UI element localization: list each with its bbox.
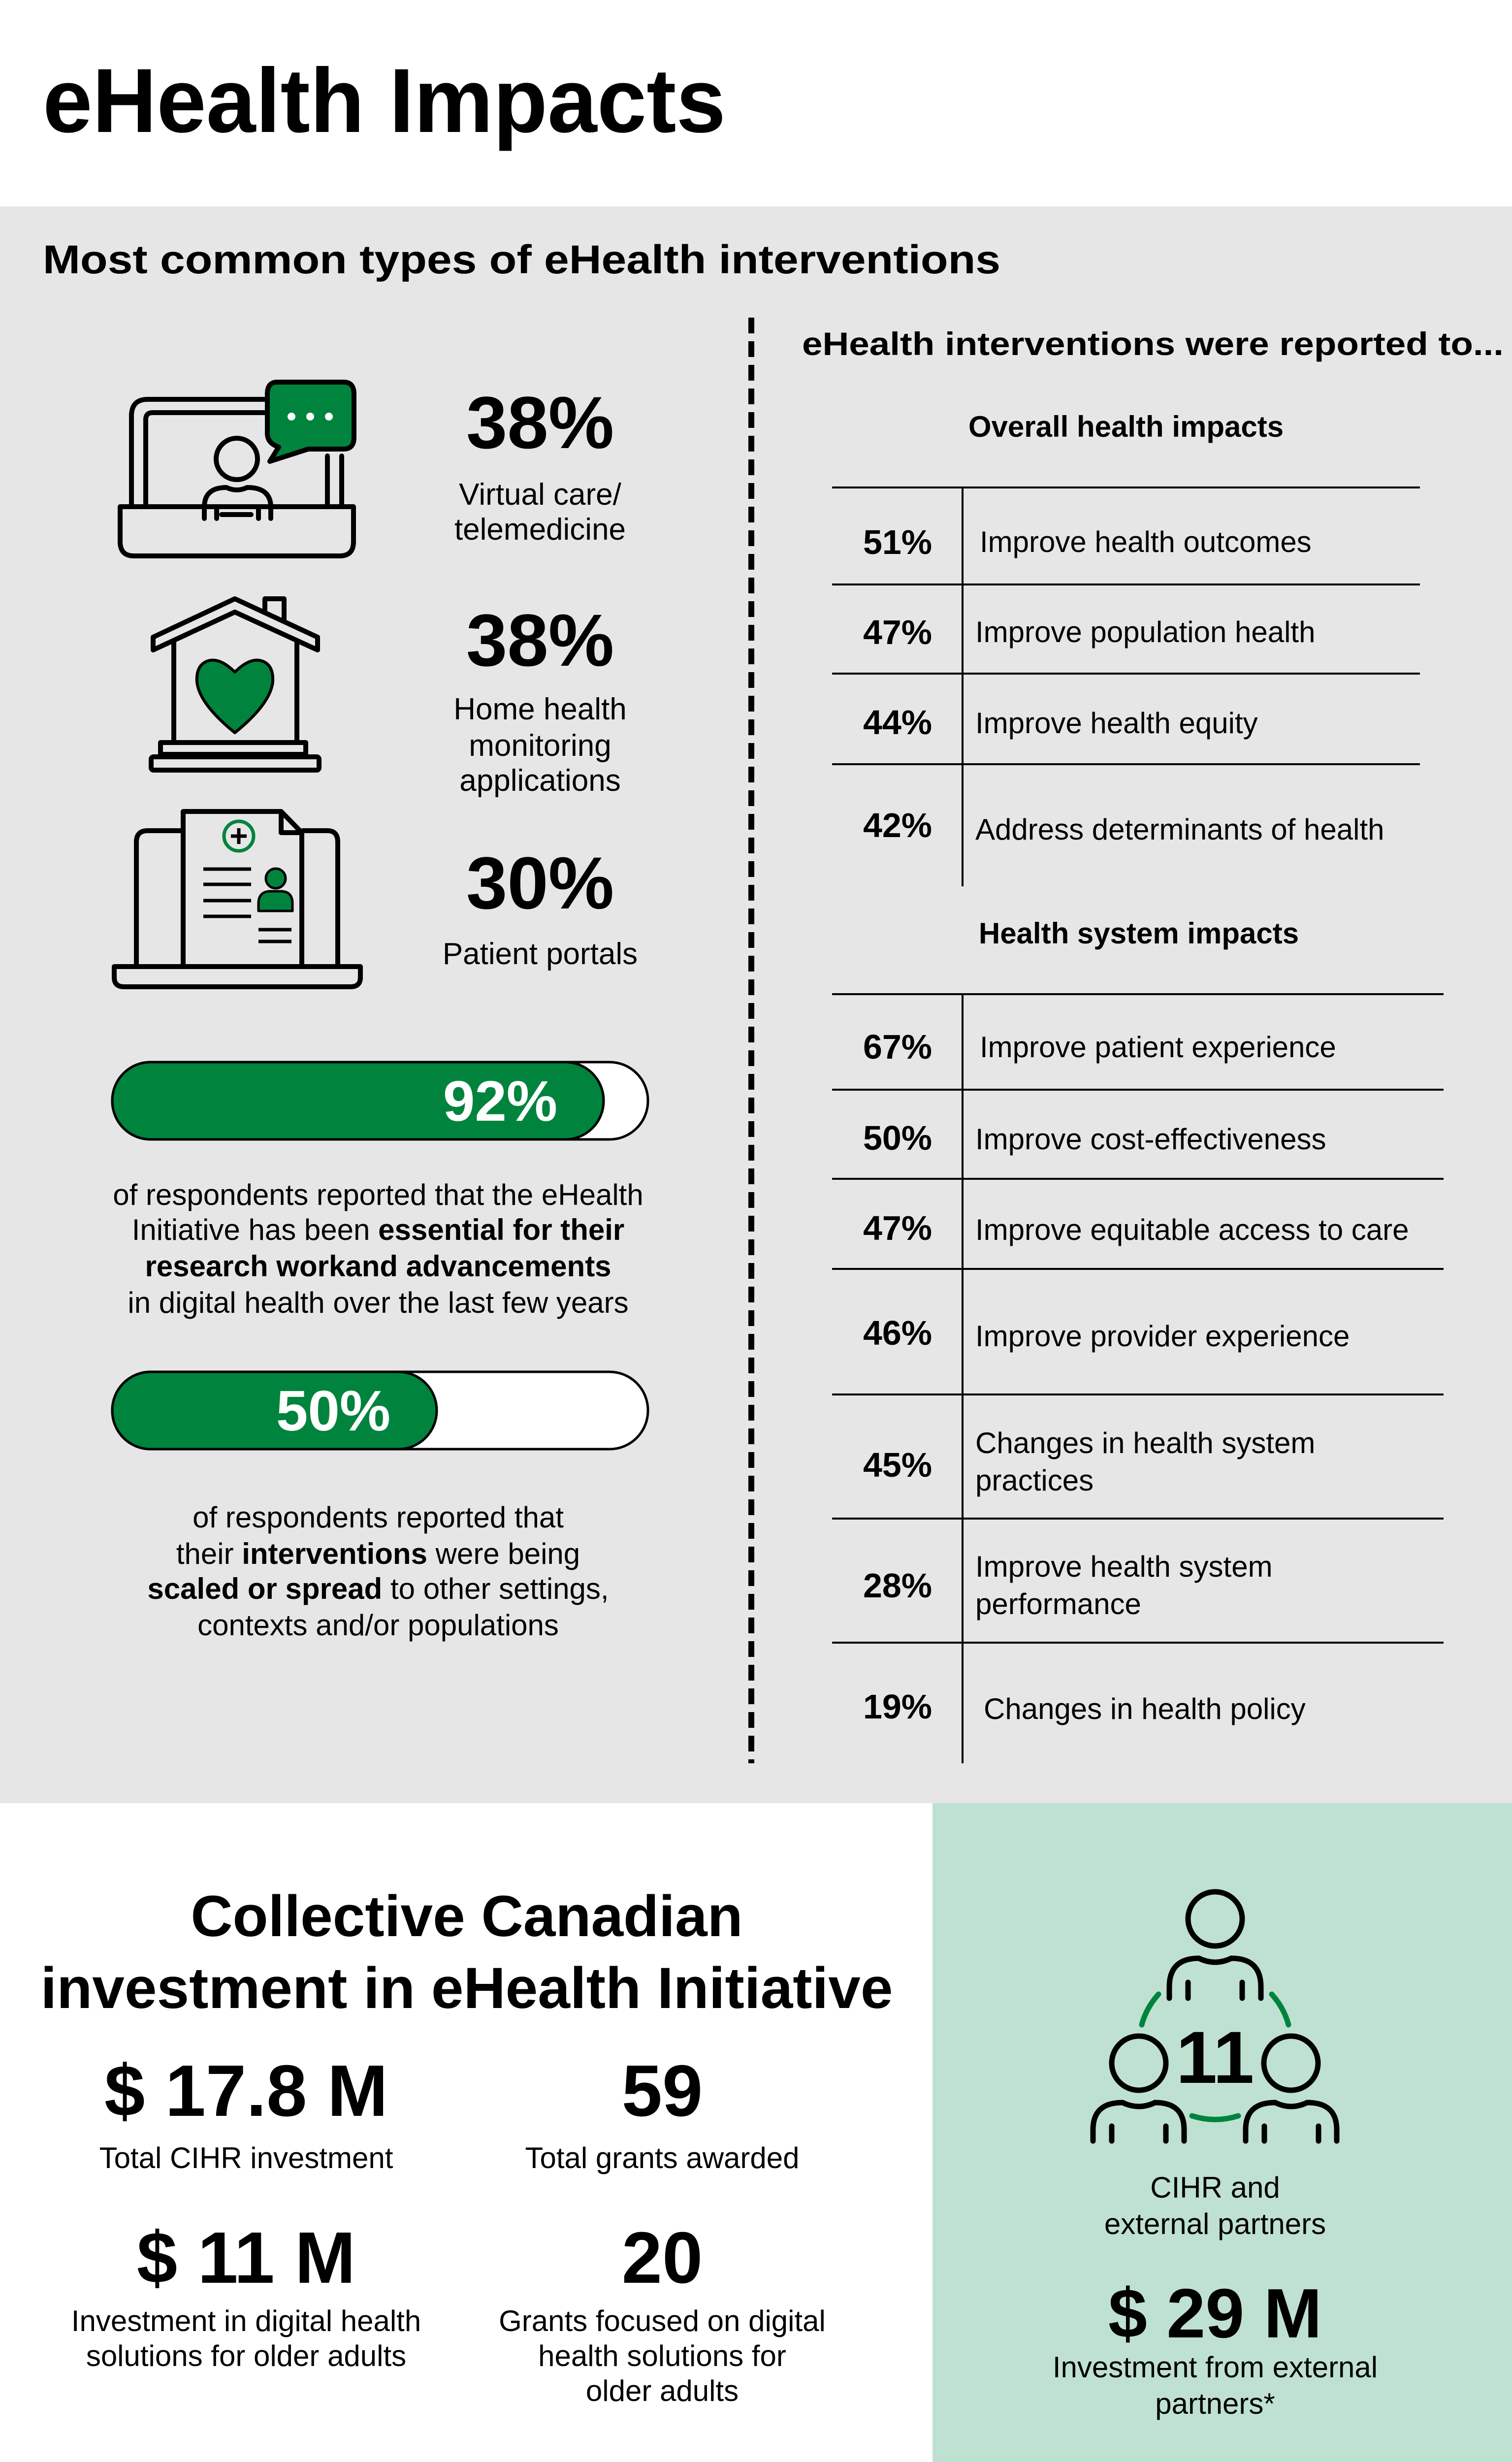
text: scaled or spread: their interventions were being [176,1537,580,1570]
subheading: health system impacts: Health system impacts [979,917,1299,950]
heading: reported to: eHealth interventions were reported to... [802,325,1504,362]
text: scaled or spread: scaled or spread to other settings, [147,1572,609,1605]
table: overall health impacts: 51% [863,523,932,561]
table: overall health impacts: Improve health outcomes [980,525,1312,558]
table: health system impacts: practices [975,1464,1094,1497]
divider: dashed [748,318,754,1763]
stat: total grants [525,2050,800,2174]
table: overall health impacts [832,487,1420,886]
table: health system impacts [832,994,1444,1763]
icon: patient portal [114,811,360,987]
stat: home health monitoring: applications [459,764,621,798]
stat: older adults grants: Grants focused on digital [499,2304,826,2337]
stat: older adults grants: older adults [586,2374,739,2407]
table: overall health impacts: Improve population health [975,616,1315,648]
stat: virtual care: telemedicine [454,513,626,547]
stat: total grants: 59 [622,2050,703,2132]
table: health system impacts: 67% [863,1028,932,1066]
table: health system impacts: 47% [863,1209,932,1247]
table: overall health impacts: 44% [863,703,932,742]
icon: house with heart [151,599,319,770]
table: health system impacts: 50% [863,1119,932,1157]
table: health system impacts: Improve provider experience [975,1320,1350,1353]
table: health system impacts: performance [975,1587,1141,1620]
stat: older adults investment: $ 11 M [137,2217,355,2299]
stat: virtual care [454,381,626,547]
title: eHealth Impacts [43,50,726,152]
heading: collective investment: Collective Canadian [191,1884,743,1949]
panel: interventions (gray) [0,206,1512,1803]
table: health system impacts: 46% [863,1314,932,1352]
label: partners [1104,2171,1326,2240]
table: overall health impacts: Address determinants of health [975,813,1384,846]
icon: laptop with video call [120,382,354,556]
subtitle: Most common types of eHealth interventions [43,237,1000,282]
stat: patient portals [443,842,638,971]
table: overall health impacts: 47% [863,613,932,651]
text: essential for research: of respondents reported that the eHealth [113,1178,643,1211]
table: health system impacts: Improve equitable access to care [975,1213,1409,1246]
table: health system impacts: Changes in health system [975,1426,1315,1459]
label: partners: CIHR and [1150,2171,1280,2204]
text: scaled or spread [147,1501,609,1642]
bar: 92% [112,1062,648,1139]
table: health system impacts: Improve cost-effectiveness [975,1123,1326,1156]
stat: patient portals: Patient portals [443,937,638,971]
text: essential for research: in digital health over the last few years [128,1286,629,1319]
stat: virtual care: 38% [466,381,614,464]
table: health system impacts: Improve patient experience [980,1031,1336,1064]
table: overall health impacts: 42% [863,806,932,844]
bar: 50%: 50% [276,1379,390,1443]
stat: external investment: partners* [1155,2387,1275,2420]
bar: 92%: 92% [443,1069,557,1133]
text: scaled or spread: of respondents reported that [193,1501,564,1534]
label: partners: external partners [1104,2207,1326,2240]
stat: older adults investment: Investment in digital health [71,2304,421,2337]
stat: home health monitoring: monitoring [469,729,611,763]
table: overall health impacts: Improve health equity [975,707,1258,740]
stat: virtual care: Virtual care/ [459,478,622,512]
stat: older adults investment [71,2217,421,2372]
text: essential for research [113,1178,643,1319]
subheading: overall health impacts: Overall health impacts [968,410,1284,443]
table: health system impacts: Improve health system [975,1550,1273,1583]
stat: older adults grants: 20 [622,2217,703,2299]
stat: older adults grants: health solutions for [538,2339,786,2372]
icon: three people network [1093,1892,1337,2141]
panel: partners (green) [933,1803,1512,2462]
heading: collective investment [40,1884,893,2021]
heading: collective investment: investment in eHealth Initiative [40,1956,893,2021]
bar: 50% [112,1372,648,1449]
stat: older adults investment: solutions for older adults [86,2339,406,2372]
text: scaled or spread: contexts and/or populations [197,1609,559,1642]
stat: total CIHR investment: Total CIHR investment [99,2141,393,2174]
stat: home health monitoring: Home health [453,692,627,726]
stat: total grants: Total grants awarded [525,2141,800,2174]
table: health system impacts: 19% [863,1687,932,1726]
stat: total CIHR investment: $ 17.8 M [104,2050,388,2132]
stat: home health monitoring: 38% [466,599,614,681]
stat: older adults grants [499,2217,826,2407]
text: essential for research: Initiative has been essential for their [132,1213,624,1246]
stat: external investment: $ 29 M [1108,2274,1322,2353]
table: health system impacts: 45% [863,1446,932,1484]
number: 11 partners: 11 [1176,2016,1254,2099]
table: health system impacts: 28% [863,1566,932,1605]
text: essential for research: research workand advancements [145,1250,611,1283]
stat: patient portals: 30% [466,842,614,924]
table: health system impacts: Changes in health policy [984,1692,1306,1725]
stat: total CIHR investment [99,2050,393,2174]
stat: home health monitoring [453,599,627,798]
stat: external investment: Investment from external [1053,2351,1378,2384]
stat: external investment [1053,2274,1378,2420]
